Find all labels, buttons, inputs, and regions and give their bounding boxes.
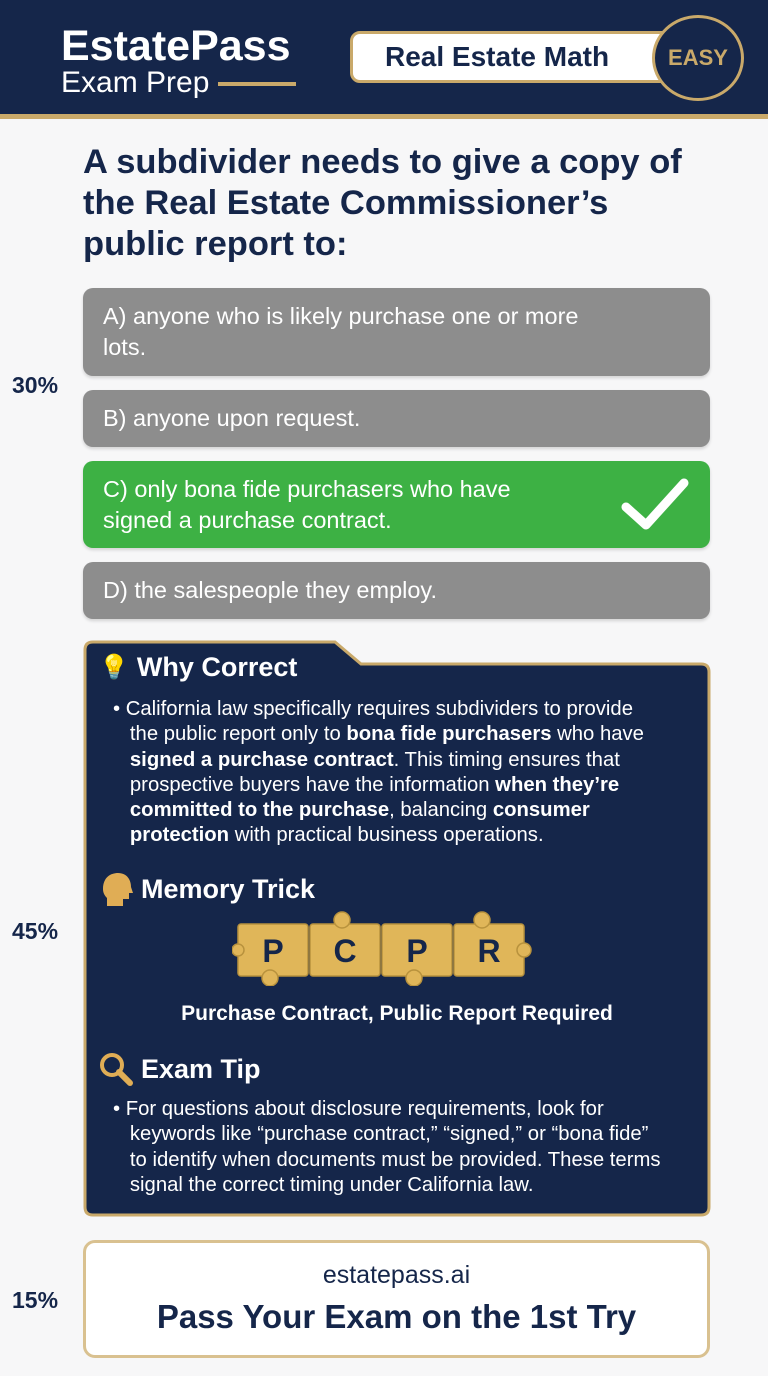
difficulty badge: EASY bbox=[668, 45, 728, 70]
puzzle: PCPR: P bbox=[406, 933, 428, 969]
text: exam tip: keywords like “purchase contract,” “signed,” or “bona fide” bbox=[130, 1123, 648, 1145]
topic badge bbox=[350, 31, 680, 83]
option C correct: signed a purchase contract. bbox=[103, 506, 392, 532]
footer CTA: estatepass.ai bbox=[323, 1261, 470, 1289]
logo: Exam Prep bbox=[61, 66, 209, 99]
option A bbox=[83, 288, 710, 376]
text: exam tip bbox=[113, 1098, 660, 1196]
percent 45: 45% bbox=[12, 918, 58, 944]
puzzle: PCPR: R bbox=[477, 933, 501, 969]
heading: exam tip bbox=[100, 1053, 261, 1086]
heading: why correct: 💡 bbox=[99, 654, 129, 681]
text: exam tip: to identify when documents must be provided. These terms bbox=[130, 1149, 660, 1171]
text: why correct: signed a purchase contract. This timing ensures that bbox=[130, 749, 620, 771]
puzzle: PCPR: C bbox=[333, 933, 357, 969]
percent 30: 30% bbox=[12, 372, 58, 398]
footer CTA: Pass Your Exam on the 1st Try bbox=[157, 1298, 636, 1335]
option B bbox=[83, 390, 710, 447]
option A: lots. bbox=[103, 334, 146, 360]
option B: B) anyone upon request. bbox=[103, 405, 360, 431]
logo: EstatePass bbox=[61, 22, 290, 70]
text: exam tip: • For questions about disclosure requirements, look for bbox=[113, 1098, 604, 1120]
heading: memory trick: Memory Trick bbox=[141, 874, 315, 904]
text: why correct: committed to the purchase, balancing consumer bbox=[130, 799, 590, 821]
text: why correct: protection with practical business operations. bbox=[130, 824, 544, 846]
option C correct bbox=[83, 461, 710, 548]
text: why correct: the public report only to bona fide purchasers who have bbox=[130, 723, 644, 745]
text: why correct: prospective buyers have the information when they’re bbox=[130, 774, 619, 796]
text: exam tip: signal the correct timing under California law. bbox=[130, 1174, 533, 1196]
question: A subdivider needs to give a copy of bbox=[83, 143, 682, 181]
topic badge: Real Estate Math bbox=[385, 41, 609, 72]
option D bbox=[83, 562, 710, 619]
text: why correct: • California law specifically requires subdividers to provide bbox=[113, 698, 633, 720]
header bbox=[0, 0, 768, 119]
question: the Real Estate Commissioner’s bbox=[83, 184, 608, 222]
icon: check bbox=[622, 478, 688, 530]
text: why correct bbox=[113, 698, 644, 846]
option C correct: C) only bona fide purchasers who have bbox=[103, 476, 511, 502]
heading: exam tip: Exam Tip bbox=[141, 1054, 261, 1084]
puzzle: PCPR bbox=[232, 911, 532, 986]
question: public report to: bbox=[83, 225, 347, 263]
percent 15: 15% bbox=[12, 1287, 58, 1313]
difficulty badge bbox=[652, 15, 744, 101]
footer CTA bbox=[83, 1240, 710, 1358]
option A: A) anyone who is likely purchase one or more bbox=[103, 303, 578, 329]
caption: memory trick: Purchase Contract, Public Report Required bbox=[181, 1002, 613, 1025]
puzzle: PCPR: P bbox=[262, 933, 284, 969]
logo bbox=[61, 22, 296, 99]
heading: why correct: Why Correct bbox=[137, 652, 297, 682]
explanation panel bbox=[84, 640, 710, 1216]
option D: D) the salespeople they employ. bbox=[103, 577, 437, 603]
question bbox=[83, 143, 682, 263]
